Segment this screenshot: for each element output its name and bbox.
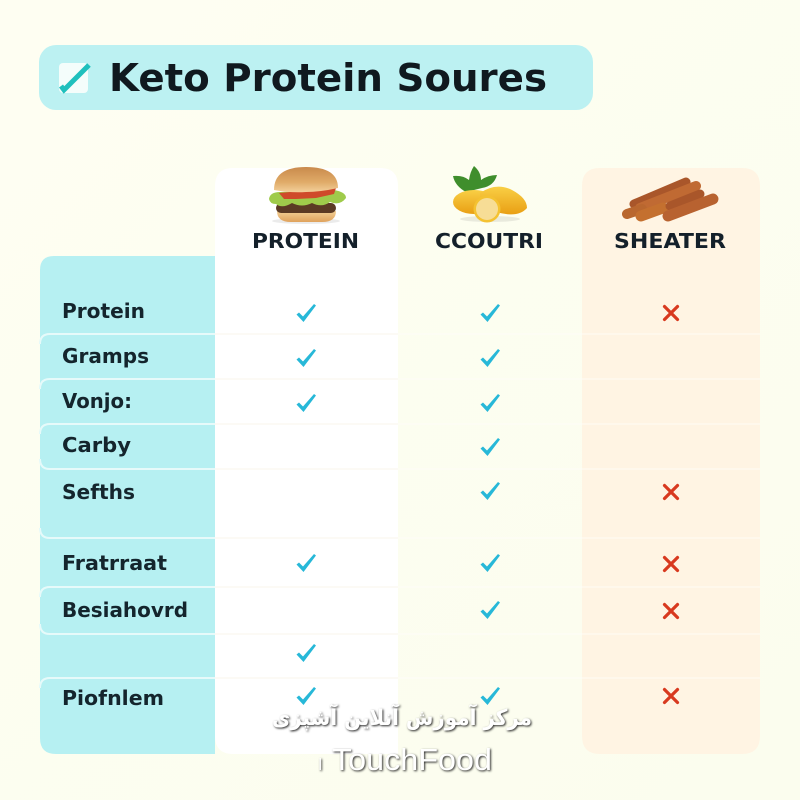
- watermark: TouchFood: TouchFood: [332, 742, 492, 777]
- column heading: SHEATER: SHEATER: [614, 229, 726, 253]
- row label: Besiahovrd: Besiahovrd: [62, 598, 188, 622]
- watermark: Persian line: مرکز آموزش آنلاین آشپزی: [272, 703, 532, 731]
- icon: lemons: [453, 166, 527, 222]
- panel: protein column: [215, 167, 398, 754]
- row label: Gramps: Gramps: [62, 344, 149, 368]
- column heading: PROTEIN: PROTEIN: [252, 229, 359, 253]
- panel: row labels: [40, 256, 215, 754]
- icon: burger: [269, 167, 346, 224]
- row label: Piotnlem: Piofnlem: [62, 686, 164, 710]
- row label: Vonjo: Vonjo:: [62, 389, 132, 413]
- row label: Sefths: Sefths: [62, 480, 135, 504]
- row label: Protein: Protein: [62, 299, 145, 323]
- watermark: small mark: ا: [318, 755, 322, 774]
- watermark: [272, 703, 532, 777]
- column heading: CCOUTRI: CCOUTRI: [435, 229, 543, 253]
- title text: Keto Protein Soures: [109, 56, 547, 100]
- panel: middle column: [398, 166, 582, 754]
- checks: middle column: [480, 304, 500, 705]
- panel: sheater column: [582, 168, 760, 754]
- icon: meat sticks: [627, 182, 713, 216]
- crosses: sheater column: [664, 306, 678, 702]
- title banner: [39, 45, 593, 110]
- row label: Carby: Carby: [62, 433, 131, 457]
- checks: protein column: [296, 304, 316, 705]
- icon: title checkbox: [59, 63, 89, 93]
- row label: Fratrraat: Fratrraat: [62, 551, 167, 575]
